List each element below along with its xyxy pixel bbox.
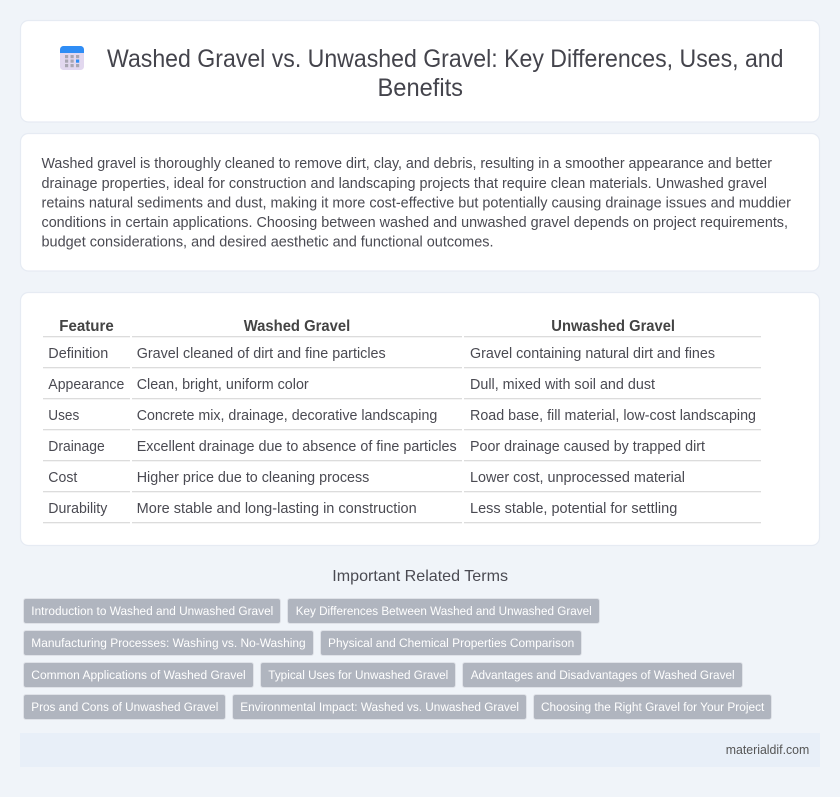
title: Washed Gravel vs. Unwashed Gravel: Key Differences, Uses, and xyxy=(107,45,784,73)
tag xyxy=(534,694,772,720)
row: definition: Definition xyxy=(48,346,108,362)
tag xyxy=(260,662,456,688)
tag: Key Differences Between Washed and Unwashed Gravel xyxy=(296,604,592,618)
summary text: retains natural sediments and dust, making it more cost-effective but potentially causing drainage issues and muddier xyxy=(42,196,791,212)
tag: Physical and Chemical Properties Comparison xyxy=(328,636,574,650)
row: definition: Gravel cleaned of dirt and fine particles xyxy=(137,346,386,362)
title: Benefits xyxy=(378,74,463,102)
row: durability: Durability xyxy=(48,501,108,517)
row: cost xyxy=(48,470,685,486)
row: drainage: Drainage xyxy=(48,439,105,455)
row: durability xyxy=(48,501,677,517)
row: cost: Higher price due to cleaning process xyxy=(137,470,369,486)
related term tags xyxy=(24,598,772,720)
row: cost: Lower cost, unprocessed material xyxy=(470,470,685,486)
summary text: conditions in certain applications. Choosing between washed and unwashed gravel depends on project requirements, xyxy=(42,215,788,231)
summary text: drainage properties, ideal for construction and landscaping projects that require clean materials. Unwashed gravel xyxy=(42,176,767,192)
footer site name: materialdif.com xyxy=(726,742,809,757)
row: appearance: Dull, mixed with soil and dust xyxy=(470,377,655,393)
row: appearance xyxy=(48,377,655,393)
table header row: Unwashed Gravel xyxy=(551,318,675,335)
row: uses xyxy=(48,408,756,424)
row: uses: Road base, fill material, low-cost landscaping xyxy=(470,408,756,424)
title xyxy=(107,45,784,102)
tag xyxy=(320,630,582,656)
tag xyxy=(24,598,280,624)
row: definition xyxy=(48,346,715,362)
tag: Advantages and Disadvantages of Washed Gravel xyxy=(471,668,735,682)
table header row: Washed Gravel xyxy=(244,318,350,335)
row: drainage: Excellent drainage due to absence of fine particles xyxy=(137,439,457,455)
row: uses: Concrete mix, drainage, decorative landscaping xyxy=(137,408,437,424)
summary text: Washed gravel is thoroughly cleaned to remove dirt, clay, and debris, resulting in a smoother appearance and better xyxy=(42,156,772,172)
row: appearance: Appearance xyxy=(48,377,124,393)
panel: summary paragraph xyxy=(20,134,820,271)
tag xyxy=(24,694,226,720)
row: cost: Cost xyxy=(48,470,77,486)
tag xyxy=(462,662,742,688)
row: definition: Gravel containing natural dirt and fines xyxy=(470,346,715,362)
summary text: budget considerations, and desired aesthetic and functional outcomes. xyxy=(42,234,494,250)
table header row xyxy=(59,318,675,335)
tag: Environmental Impact: Washed vs. Unwashed Gravel xyxy=(240,700,519,714)
tag: Introduction to Washed and Unwashed Gravel xyxy=(31,604,273,618)
tag xyxy=(232,694,526,720)
panel: comparison table xyxy=(20,292,820,546)
tag: Manufacturing Processes: Washing vs. No-Washing xyxy=(31,636,306,650)
footer xyxy=(20,733,820,767)
tag: Typical Uses for Unwashed Gravel xyxy=(268,668,448,682)
row: durability: More stable and long-lasting in construction xyxy=(137,501,417,517)
tag xyxy=(24,630,314,656)
row: appearance: Clean, bright, uniform color xyxy=(137,377,309,393)
tag: Pros and Cons of Unwashed Gravel xyxy=(31,700,218,714)
icon: calendar xyxy=(60,46,84,70)
tag xyxy=(288,598,600,624)
summary text xyxy=(42,156,791,250)
panel: header xyxy=(20,20,820,122)
row: durability: Less stable, potential for settling xyxy=(470,501,677,517)
tag: Common Applications of Washed Gravel xyxy=(31,668,246,682)
row: drainage xyxy=(48,439,705,455)
tag: Choosing the Right Gravel for Your Project xyxy=(541,700,765,714)
table header row: Feature xyxy=(59,318,114,335)
row: drainage: Poor drainage caused by trapped dirt xyxy=(470,439,705,455)
heading: related terms: Important Related Terms xyxy=(332,568,508,585)
tag xyxy=(24,662,254,688)
table rules xyxy=(43,336,761,523)
row: uses: Uses xyxy=(48,408,79,424)
